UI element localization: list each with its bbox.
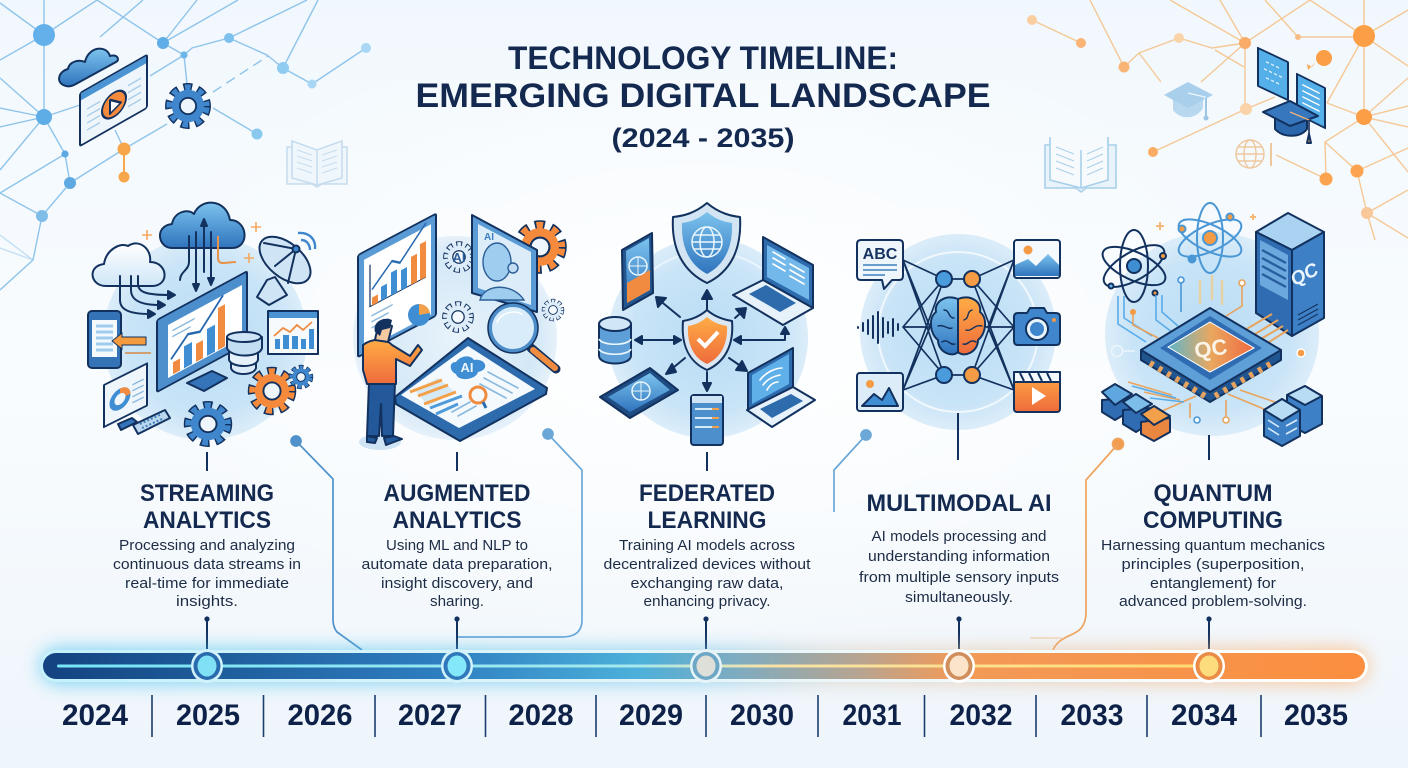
panel text: streaming analytics: insights. bbox=[176, 594, 238, 610]
sparkles bbox=[1112, 346, 1305, 357]
panel text: multimodal AI bbox=[859, 490, 1059, 606]
trend monitor bbox=[157, 271, 247, 392]
timeline node 2027 bbox=[441, 649, 473, 683]
server bbox=[691, 395, 723, 445]
year axis labels: 2031 bbox=[842, 699, 902, 732]
dark atom bbox=[1097, 230, 1171, 302]
database bbox=[227, 332, 262, 374]
panel text: federated learning: decentralized devices without bbox=[604, 557, 810, 573]
icon cluster: augmented analytics bbox=[353, 214, 562, 450]
small chart panel bbox=[268, 311, 318, 354]
gears bbox=[189, 367, 311, 442]
analytics panel bbox=[358, 214, 436, 357]
panel text: streaming analytics: Processing and analyzing bbox=[119, 538, 295, 554]
panel text: streaming analytics bbox=[113, 480, 301, 610]
white cloud with data arrows bbox=[93, 243, 175, 318]
panel text: streaming analytics: continuous data streams in bbox=[113, 557, 301, 573]
icon cluster: streaming analytics bbox=[88, 203, 319, 442]
callout connector: blue 3 bbox=[834, 430, 871, 512]
panel text: multimodal AI: MULTIMODAL AI bbox=[866, 490, 1052, 517]
check shield bbox=[683, 310, 732, 370]
small monitor with donut bbox=[104, 364, 147, 430]
panel text: augmented analytics: AUGMENTED bbox=[384, 480, 530, 507]
icon: left open book bbox=[287, 141, 347, 187]
year axis labels bbox=[62, 695, 1348, 737]
panel text: quantum computing: entanglement) for bbox=[1150, 576, 1276, 592]
ABC speech bubble bbox=[857, 240, 903, 289]
year axis labels: 2024 bbox=[62, 699, 128, 732]
camera icon bbox=[1014, 308, 1060, 345]
tablet bbox=[395, 338, 547, 441]
panel text: federated learning: LEARNING bbox=[648, 507, 766, 534]
timeline node 2032 bbox=[943, 649, 975, 683]
top-right laptop bbox=[733, 237, 813, 325]
panel text: federated learning: enhancing privacy. bbox=[644, 594, 770, 610]
QC chip bbox=[1141, 308, 1281, 402]
year axis labels: 2030 bbox=[730, 699, 794, 732]
icon: blue gear bbox=[170, 88, 206, 124]
icon cluster: multimodal AI bbox=[857, 234, 1060, 430]
icon: top right documents and graduation cap bbox=[1258, 48, 1332, 143]
image icon left bbox=[857, 373, 903, 411]
ABC speech bubble: ABC bbox=[863, 246, 898, 263]
timeline node 2034 bbox=[1193, 649, 1225, 683]
panel text: quantum computing: QUANTUM bbox=[1154, 480, 1272, 507]
globe shield bbox=[673, 203, 740, 283]
network nodes bbox=[936, 271, 980, 383]
chip traces bbox=[1118, 275, 1298, 423]
callout connector: orange bbox=[1030, 438, 1124, 650]
panel text: streaming analytics: ANALYTICS bbox=[143, 507, 271, 534]
icon: right open book bbox=[1045, 138, 1116, 192]
network decoration: blue, top left bbox=[0, 0, 371, 290]
panel text: quantum computing: Harnessing quantum mechanics bbox=[1101, 538, 1325, 554]
video icon bbox=[1014, 372, 1060, 412]
panel text: quantum computing: principles (superposition, bbox=[1122, 557, 1304, 573]
panel text: federated learning: exchanging raw data, bbox=[630, 576, 784, 592]
tablet bbox=[600, 368, 678, 418]
timeline bar bbox=[40, 648, 1368, 684]
year axis labels: 2032 bbox=[950, 699, 1012, 732]
year axis labels: 2025 bbox=[176, 699, 240, 732]
magnifier bbox=[488, 303, 556, 369]
satellite dish bbox=[251, 228, 319, 305]
brain bbox=[931, 297, 985, 354]
QC chip: QC bbox=[1193, 334, 1229, 363]
orange gear bbox=[519, 226, 561, 268]
icon: cloud and video window bbox=[59, 49, 147, 146]
panel text: quantum computing: COMPUTING bbox=[1143, 507, 1283, 534]
callout connector: blue 2 bbox=[457, 429, 582, 637]
blue atom bbox=[1156, 203, 1256, 273]
panel text: multimodal AI: AI models processing and bbox=[872, 529, 1046, 545]
network decoration: orange, top right bbox=[1027, 0, 1408, 240]
timeline node 2025 bbox=[191, 649, 223, 683]
panel text: augmented analytics: Using ML and NLP to bbox=[386, 538, 528, 554]
QC server tower bbox=[1256, 213, 1324, 336]
icon cluster: quantum computing bbox=[1097, 203, 1324, 446]
panel text: augmented analytics: insight discovery, and bbox=[381, 576, 533, 592]
panel text: streaming analytics: real-time for immediate bbox=[125, 576, 289, 592]
audio waveform bbox=[858, 312, 898, 343]
title: TECHNOLOGY TIMELINE: bbox=[508, 40, 898, 76]
year axis labels: 2033 bbox=[1060, 699, 1124, 732]
small module stacks bbox=[1102, 384, 1170, 441]
panel text: quantum computing: advanced problem-solving. bbox=[1119, 594, 1307, 610]
bottom-right laptop bbox=[747, 348, 815, 427]
neural network lines bbox=[903, 260, 1014, 390]
AI gears bbox=[446, 245, 562, 329]
year axis labels: 2034 bbox=[1171, 699, 1237, 732]
arrows bbox=[635, 290, 789, 391]
icon: pale graduation cap bbox=[1164, 82, 1213, 120]
icon cluster: federated learning bbox=[599, 203, 815, 445]
title: (2024 - 2035) bbox=[612, 123, 794, 153]
phone bbox=[622, 233, 653, 310]
panel text: streaming analytics: STREAMING bbox=[140, 480, 274, 507]
panel text: augmented analytics: ANALYTICS bbox=[392, 507, 522, 534]
panel text: multimodal AI: understanding information bbox=[868, 549, 1050, 565]
year axis labels: 2035 bbox=[1284, 699, 1348, 732]
panel text: quantum computing bbox=[1101, 480, 1325, 610]
image icon right bbox=[1014, 240, 1060, 278]
year axis labels: 2029 bbox=[619, 699, 683, 732]
pie chart bbox=[408, 304, 430, 326]
database bbox=[599, 317, 631, 364]
callout connector: blue 1 bbox=[291, 436, 362, 650]
title bbox=[416, 40, 990, 153]
server blocks bbox=[1264, 386, 1322, 446]
panel text: augmented analytics: sharing. bbox=[430, 594, 484, 610]
panel text: federated learning: Training AI models across bbox=[619, 538, 795, 554]
icon: pale globe bbox=[1236, 140, 1271, 168]
AI gears: AI bbox=[452, 250, 466, 265]
QC server tower: QC bbox=[1287, 259, 1322, 291]
year axis labels: 2027 bbox=[398, 699, 462, 732]
AI portrait panel: AI bbox=[484, 232, 494, 243]
stems: text to timeline nodes bbox=[205, 617, 1211, 650]
stems: icons to headings bbox=[207, 413, 1209, 471]
panel text: augmented analytics: automate data preparation, bbox=[362, 557, 552, 573]
title: EMERGING DIGITAL LANDSCAPE bbox=[416, 77, 990, 115]
timeline node 2029 bbox=[690, 649, 722, 683]
keyboard bbox=[133, 410, 170, 434]
year axis labels: 2028 bbox=[508, 699, 574, 732]
analyst figure bbox=[359, 319, 422, 450]
tablet: AI bbox=[460, 360, 474, 375]
blue cloud with vertical arrows bbox=[142, 203, 261, 291]
panel text: multimodal AI: from multiple sensory inputs bbox=[859, 570, 1059, 586]
phone with orange arrow bbox=[88, 311, 151, 368]
panel text: multimodal AI: simultaneously. bbox=[905, 590, 1013, 606]
panel text: federated learning: FEDERATED bbox=[639, 480, 775, 507]
panel text: augmented analytics bbox=[362, 480, 552, 610]
panel text: federated learning bbox=[604, 480, 810, 610]
year axis labels: 2026 bbox=[288, 699, 352, 732]
AI portrait panel bbox=[472, 215, 537, 312]
